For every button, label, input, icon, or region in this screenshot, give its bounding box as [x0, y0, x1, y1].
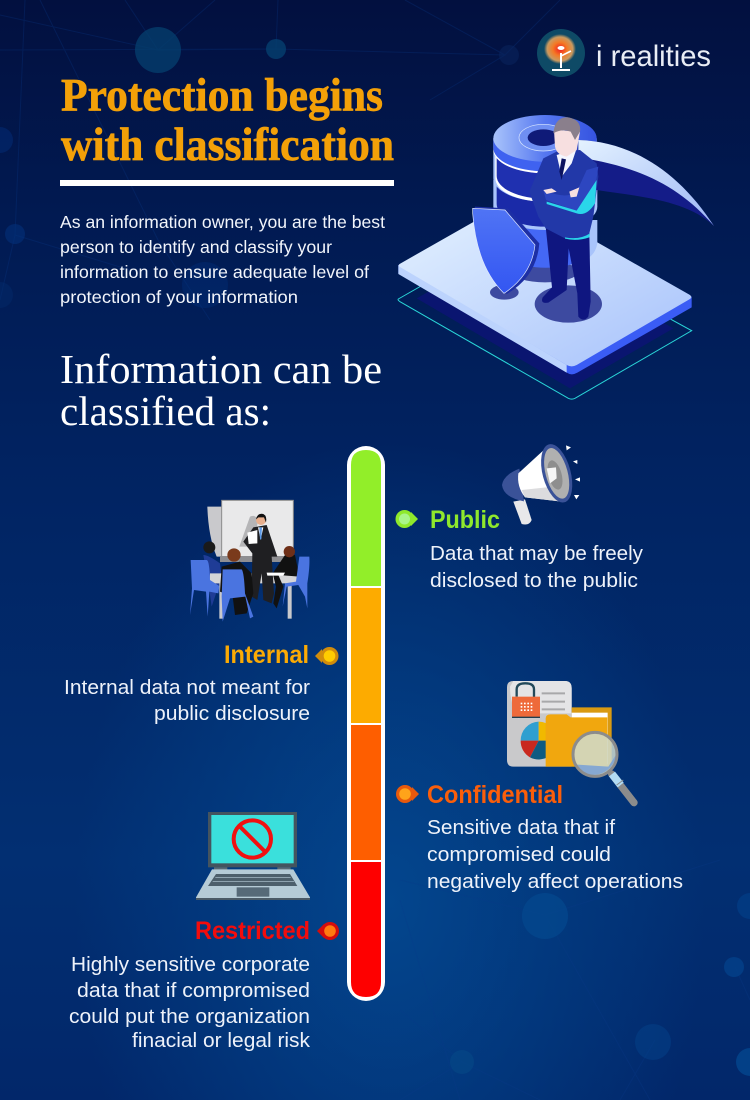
- subheading: [60, 346, 382, 434]
- public description: Data that may be freely: [430, 543, 643, 565]
- database stack: [493, 115, 597, 282]
- internal description: Internal data not meant for: [64, 677, 310, 699]
- title: [61, 70, 394, 171]
- businessman: [529, 117, 602, 323]
- internal description: [64, 677, 310, 725]
- segment: restricted: [351, 862, 381, 997]
- confidential description: compromised could: [427, 844, 611, 866]
- icon: megaphone: [502, 441, 580, 524]
- restricted description: could put the organization: [69, 1006, 310, 1028]
- icon: meeting: [190, 500, 309, 622]
- subheading: Information can be: [60, 346, 382, 392]
- title rule: [60, 180, 394, 186]
- subheading: classified as:: [60, 388, 271, 434]
- logo wordmark: i realities: [596, 40, 711, 73]
- intro paragraph: information to ensure adequate level of: [60, 262, 369, 282]
- shield: [473, 207, 539, 300]
- intro paragraph: protection of your information: [60, 287, 298, 307]
- restricted label: Restricted: [195, 917, 310, 945]
- segment: confidential: [351, 725, 381, 860]
- intro paragraph: As an information owner, you are the best: [60, 212, 385, 232]
- restricted marker: [317, 922, 339, 940]
- public marker: [396, 510, 418, 528]
- confidential description: [427, 817, 683, 893]
- title: Protection begins: [61, 70, 383, 122]
- classification scale: [347, 446, 385, 1001]
- logo mark: [537, 29, 585, 77]
- public description: disclosed to the public: [430, 570, 638, 592]
- segment: internal: [351, 588, 381, 723]
- logo: [537, 29, 711, 77]
- restricted description: finacial or legal risk: [132, 1030, 311, 1052]
- restricted description: [69, 954, 311, 1052]
- confidential description: Sensitive data that if: [427, 817, 615, 839]
- restricted description: Highly sensitive corporate: [71, 954, 310, 976]
- confidential marker: [396, 785, 419, 803]
- segment: public: [351, 450, 381, 586]
- platform: [398, 197, 692, 399]
- restricted block: [69, 812, 339, 1052]
- internal marker: [315, 647, 338, 665]
- internal block: [64, 500, 338, 725]
- intro paragraph: person to identify and classify your: [60, 237, 332, 257]
- restricted description: data that if compromised: [77, 980, 310, 1002]
- cape: [577, 140, 714, 226]
- confidential description: negatively affect operations: [427, 871, 683, 893]
- public block: [396, 441, 643, 592]
- internal description: public disclosure: [154, 703, 310, 725]
- confidential block: [396, 681, 683, 893]
- icon: documents and magnifier: [507, 681, 634, 803]
- confidential label: Confidential: [427, 781, 563, 809]
- hero illustration: [398, 115, 714, 399]
- intro paragraph: [60, 212, 385, 307]
- title: with classification: [61, 119, 394, 171]
- internal label: Internal: [224, 641, 309, 669]
- public label: Public: [430, 506, 500, 534]
- icon: blocked laptop: [196, 812, 310, 900]
- public description: [430, 543, 643, 592]
